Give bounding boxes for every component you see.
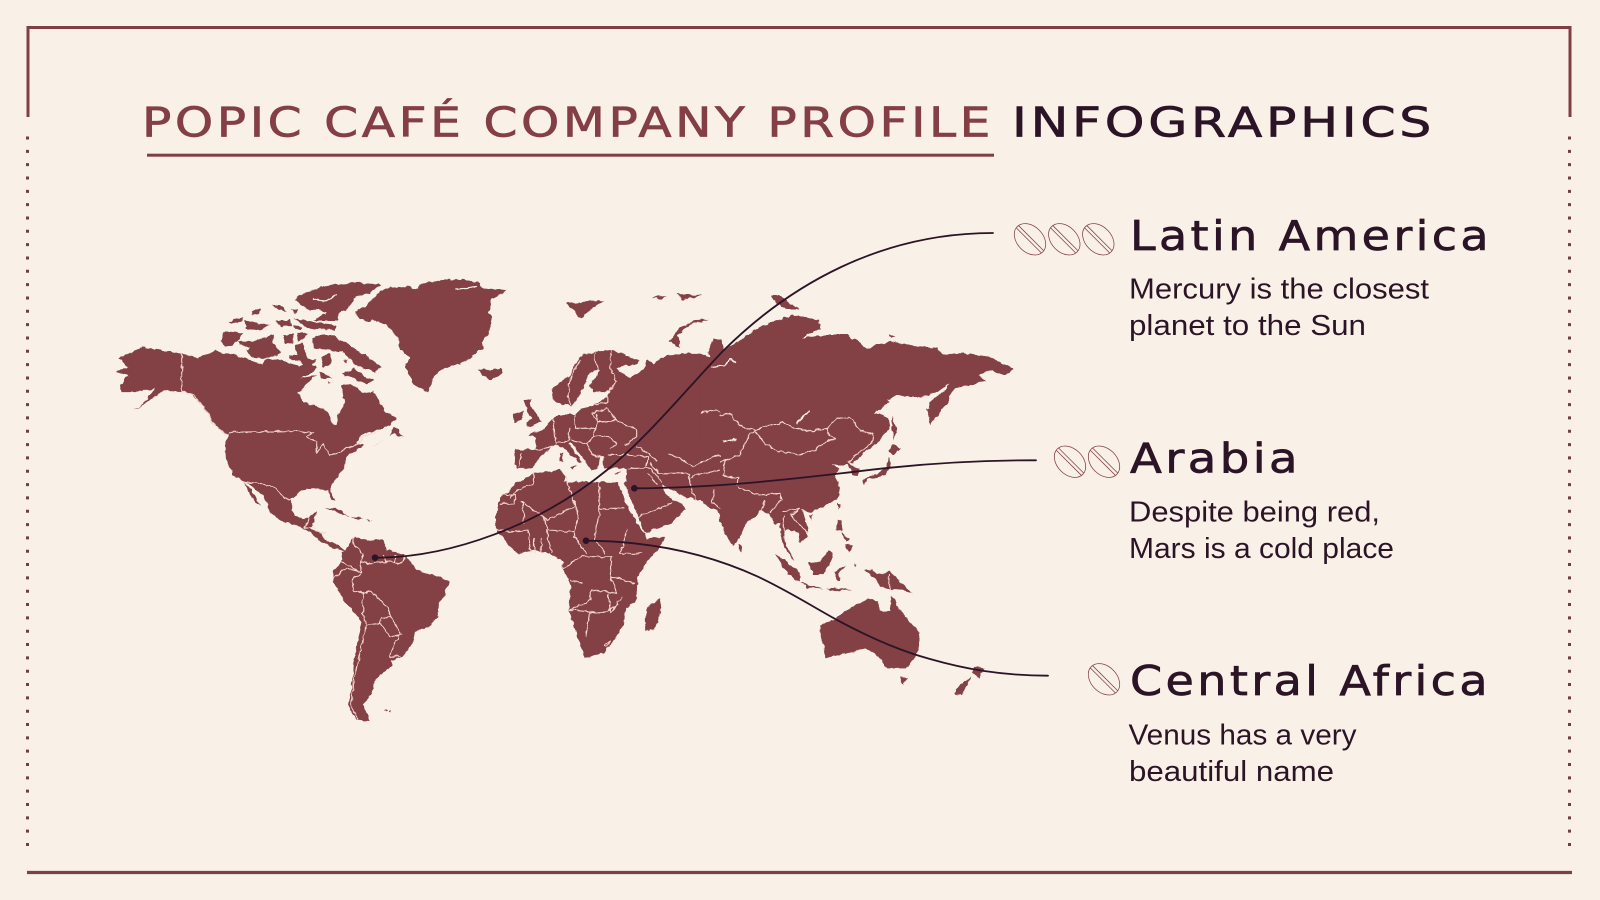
text: Arabia description: Mars is a cold place [1129, 533, 1394, 565]
icon: three coffee beans [1008, 217, 1120, 261]
heading: Latin America: Latin America [1130, 212, 1492, 260]
title part two: INFOGRAPHICS [1012, 99, 1435, 147]
text: Latin America description: Mercury is the closest [1129, 273, 1429, 305]
panel: Latin America [1008, 212, 1492, 342]
text: Arabia description [1129, 497, 1394, 565]
text: Central Africa description: beautiful name [1129, 756, 1334, 788]
map: Russia, Middle East, Africa, Australia [496, 294, 1013, 695]
panel: Central Africa [1082, 657, 1491, 788]
icon: one coffee bean [1082, 657, 1126, 701]
text: Latin America description [1129, 273, 1429, 342]
title underline [147, 154, 994, 157]
title part one: POPIC CAFÉ COMPANY PROFILE [142, 99, 994, 147]
icon: two coffee beans [1048, 440, 1126, 484]
text: Central Africa description: Venus has a very [1128, 719, 1357, 751]
text: Arabia description: Despite being red, [1129, 497, 1380, 529]
map: Americas [117, 347, 449, 722]
connector curve: Latin America [372, 233, 993, 561]
map: Europe [513, 350, 700, 474]
heading: Arabia: Arabia [1130, 435, 1301, 483]
connector curve: Central Africa [583, 537, 1048, 676]
world map [117, 279, 1013, 722]
connector curve: Arabia [631, 460, 1036, 492]
text: Central Africa description [1128, 719, 1357, 788]
text: Latin America description: planet to the Sun [1129, 310, 1366, 342]
title [142, 99, 1435, 157]
map: Canadian Arctic, Greenland, Iceland [221, 279, 507, 393]
map: East and South Asia [720, 400, 913, 593]
panel: Arabia [1048, 435, 1394, 565]
heading: Central Africa: Central Africa [1130, 657, 1491, 705]
